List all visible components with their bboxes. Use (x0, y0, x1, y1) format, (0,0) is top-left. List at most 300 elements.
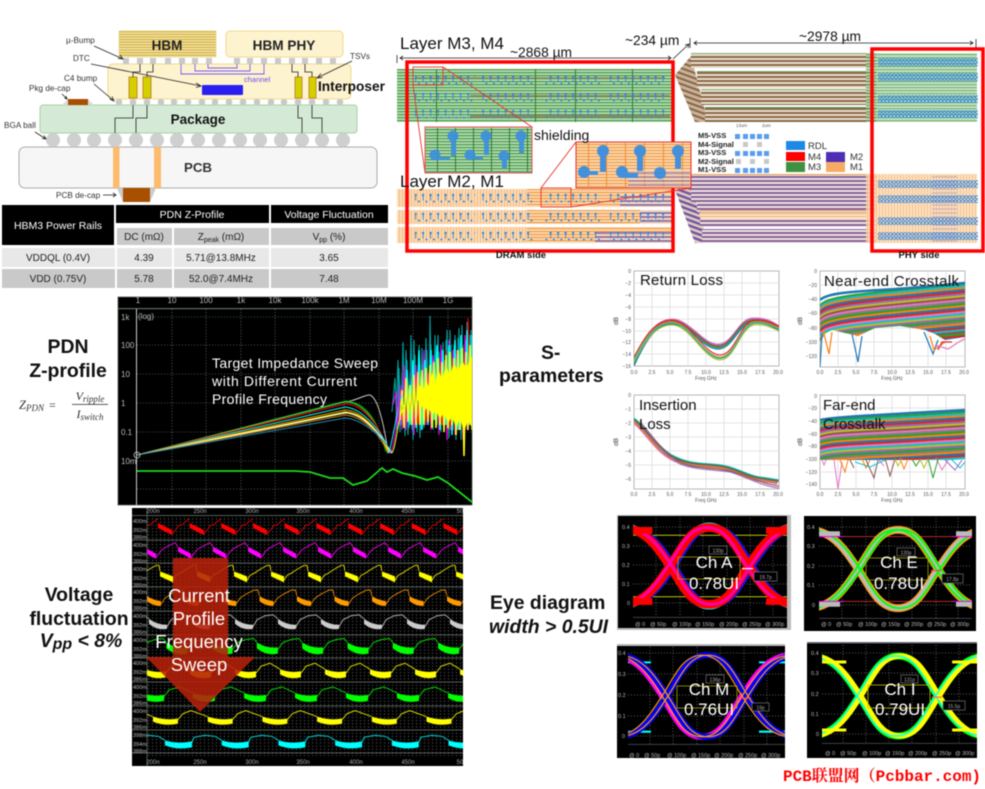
layer stack legend (698, 123, 771, 174)
row VDDQL: 3.65 (319, 253, 339, 264)
axes: −2 (625, 421, 631, 427)
heading: PDN Z-profile: Z-profile (29, 360, 107, 382)
x axis labels: 100k (301, 296, 320, 305)
axis labels: @ 100p (667, 753, 686, 759)
axis labels: @ 50p (836, 622, 852, 628)
channel label: Ch M (689, 680, 729, 699)
HBM PHY die: HBM PHY (253, 38, 315, 53)
DTC (202, 85, 243, 95)
waveforms (147, 516, 463, 753)
chart title (823, 397, 886, 433)
M3 M4 routing middle (691, 53, 876, 122)
voltage axis labels: 386m (133, 725, 147, 731)
axes: Freq GHz (695, 376, 717, 382)
voltage axis labels: 392m (133, 647, 147, 653)
axes: −2 (625, 281, 631, 287)
chart: far-end crosstalk (797, 394, 969, 504)
row VDDQL (2, 248, 388, 267)
axes: −40 (809, 419, 817, 425)
material colour legend: M1 (850, 162, 863, 173)
axis labels: 0.3 (811, 671, 819, 677)
x axis labels: 10k (269, 296, 282, 305)
layer stack legend: 13um (736, 123, 748, 128)
callout labels: Pkg de-cap (29, 84, 71, 93)
chart title: Loss (639, 416, 671, 433)
axis labels: @ 250p (742, 622, 761, 628)
layout panel (397, 29, 983, 261)
axes: dB (797, 317, 804, 325)
table sub-header (117, 228, 388, 245)
M3 M4 PHY side (866, 53, 978, 122)
time axis: 50 (457, 509, 464, 515)
axes: 2.5 (649, 492, 656, 498)
sweep arrow label: Sweep (171, 654, 227, 675)
axes: −4 (625, 293, 631, 299)
axes: −120 (806, 470, 817, 476)
row VDD: VDD (0.75V) (30, 274, 86, 285)
axes: 20.0 (773, 370, 783, 376)
layer stack legend: M5-VSS (698, 131, 726, 140)
axes: −3 (625, 435, 631, 441)
micro bumps (123, 58, 336, 64)
axes: 0.0 (817, 492, 824, 498)
dimension labels: ~2868 µm (510, 45, 572, 60)
channel label (875, 680, 925, 719)
heading: S-parameters: parameters (499, 365, 604, 387)
y axis labels: 1k (121, 313, 130, 322)
table: HBM3 power rails (2, 205, 388, 288)
axis labels (622, 525, 784, 628)
voltage axis labels: 400m (133, 661, 147, 667)
axis labels: @ 0 (635, 622, 645, 628)
channel label: Ch A (696, 553, 733, 572)
axis labels (811, 651, 974, 757)
table sub-header: V (313, 232, 319, 243)
voltage axis labels: 400m (133, 614, 147, 620)
formula: V (76, 389, 83, 403)
callout labels: BGA ball (4, 121, 36, 130)
side captions (496, 250, 940, 261)
axis labels (807, 525, 969, 628)
axis labels: 0.1 (811, 712, 819, 718)
axis labels: 0.4 (811, 651, 819, 657)
x axis labels: 10 (168, 296, 177, 305)
axes: 7.5 (871, 492, 878, 498)
curves (820, 410, 965, 489)
heading: PDN Z-profile (29, 336, 107, 382)
y axis labels: (log) (138, 312, 154, 321)
voltage axis labels: 392m (133, 599, 147, 605)
TSVs (129, 77, 316, 98)
axis labels: 0.4 (622, 525, 630, 531)
axis labels: @ 50p (644, 753, 660, 759)
chart annotation: with Different Current (211, 373, 357, 389)
axes: −120 (806, 354, 817, 360)
marker tags (706, 675, 769, 712)
voltage axis labels: 386m (133, 559, 147, 565)
axes: −12 (623, 340, 631, 346)
sweep arrow label: Profile (173, 608, 225, 629)
eye traces (612, 655, 798, 737)
axes: 12.5 (719, 370, 729, 376)
axes (797, 269, 969, 382)
axes: 20.0 (773, 492, 783, 498)
axes: 15.0 (737, 370, 747, 376)
axis labels: @ 150p (881, 622, 900, 628)
voltage axis labels (133, 519, 147, 755)
voltage axis labels: 392m (133, 718, 147, 724)
axes: −60 (809, 432, 817, 438)
dimension labels: ~2978 µm (799, 29, 861, 44)
sweep arrow label: Frequency (155, 631, 243, 652)
voltage axis labels: 386m (133, 583, 147, 589)
axes: −6 (625, 305, 631, 311)
time axis: 200n (146, 509, 160, 515)
M2 M1 PHY side (866, 174, 978, 243)
frame (617, 644, 785, 758)
axis labels: 0.3 (807, 544, 815, 550)
axes: −100 (806, 340, 817, 346)
axis labels: @ 200p (904, 622, 923, 628)
axes: 7.5 (871, 370, 878, 376)
time axis: 300n (245, 509, 259, 515)
axes: −16 (623, 364, 631, 370)
row VDDQL: VDDQL (0.4V) (26, 253, 90, 264)
eye-width box (868, 685, 930, 708)
axes: Freq GHz (695, 498, 717, 504)
axis labels: @ 0 (821, 622, 831, 628)
layer stack legend: M2-Signal (698, 157, 734, 166)
axes: 5.0 (667, 492, 674, 498)
voltage axis labels: 400m (133, 519, 147, 525)
axis labels: 0.1 (622, 582, 630, 588)
axis labels: 0 (627, 601, 630, 607)
axis labels: 0 (812, 603, 815, 609)
voltage axis labels: 394m (133, 742, 147, 748)
axes: 0 (628, 269, 631, 275)
axis labels: 0.4 (618, 651, 626, 657)
callout arrows (35, 46, 352, 197)
marker tags: 130p (900, 550, 912, 556)
axis labels: 0.2 (811, 692, 819, 698)
table sub-header: peak (204, 237, 220, 244)
interposer: Interposer (318, 79, 386, 94)
time axis (146, 509, 464, 766)
axis labels: @ 150p (885, 751, 904, 757)
y axis labels: 10 (121, 370, 130, 379)
x axis labels: 100 (199, 296, 213, 305)
axes: 0 (814, 394, 817, 400)
axis labels: 0 (816, 732, 819, 738)
voltage axis labels: 400m (133, 638, 147, 644)
channel label: 0.78UI (874, 574, 924, 593)
heading: eye diagram: Eye diagram (490, 592, 605, 614)
dimension labels (510, 29, 861, 60)
axes: 12.5 (719, 492, 729, 498)
axes: −20 (809, 283, 817, 289)
voltage axis labels: 400m (133, 567, 147, 573)
eye traces (806, 530, 985, 608)
axes: 10.0 (701, 492, 711, 498)
axis labels: @ 200p (719, 622, 738, 628)
callout labels: TSVs (350, 52, 370, 61)
voltage axis labels: 386m (133, 630, 147, 636)
formula: switch (80, 412, 104, 422)
layer stack legend: M1-VSS (698, 165, 726, 174)
eye-width box (866, 558, 928, 580)
eye traces (808, 656, 985, 736)
axes: dB (797, 438, 804, 446)
chart title: Crosstalk (823, 416, 886, 433)
PHY side red box (872, 49, 983, 251)
voltage axis labels: 386m (133, 677, 147, 683)
axes: 0 (814, 269, 817, 275)
axis labels: 0.1 (807, 583, 815, 589)
marker tags (709, 546, 777, 581)
chart: return loss (613, 269, 783, 382)
axes: 2.5 (835, 370, 842, 376)
eye-width box (677, 686, 737, 708)
table header: Voltage Fluctuation (284, 209, 374, 221)
heading: Voltage fluctuation (29, 584, 129, 653)
axes (613, 269, 783, 382)
PCB (19, 147, 377, 188)
x axis labels (136, 296, 453, 305)
dimension labels: ~234 µm (625, 33, 679, 48)
formula: = (49, 398, 56, 412)
time axis: 350n (296, 509, 310, 515)
axes: 17.5 (755, 370, 765, 376)
axes: 2.5 (649, 370, 656, 376)
axis labels: 0.3 (618, 672, 626, 678)
heading: Voltage fluctuation: < 8% (72, 630, 122, 652)
axes: dB (613, 438, 620, 446)
voltage axis labels: 400m (133, 709, 147, 715)
frame (617, 515, 791, 630)
chart grid (137, 309, 472, 505)
channel label: 0.79UI (875, 700, 925, 719)
axes: 2.5 (835, 492, 842, 498)
axis labels: 0.3 (622, 544, 630, 550)
axes: −80 (809, 444, 817, 450)
chart: insertion loss (613, 393, 783, 504)
formula: PDN (25, 403, 45, 413)
callout labels: C4 bump (64, 74, 98, 83)
x axis labels: 10M (371, 296, 387, 305)
stack-up diagram (4, 31, 386, 202)
axes: −20 (809, 406, 817, 412)
shielding label: shielding (534, 127, 589, 143)
axes: −4 (625, 449, 631, 455)
x axis labels: 100M (403, 296, 423, 305)
axes: 15.0 (923, 492, 933, 498)
time axis: 200n (146, 760, 160, 766)
sweep arrow label (155, 585, 243, 675)
heading: Voltage fluctuation: fluctuation (29, 608, 129, 630)
curves (632, 418, 779, 488)
callout labels: PCB de-cap (56, 191, 101, 200)
table header: HBM3 Power Rails (14, 220, 102, 232)
package de-cap (62, 99, 94, 105)
axes: −1 (625, 407, 631, 413)
marker tags (901, 675, 965, 710)
axes: −8 (625, 317, 631, 323)
layer stack legend: M3-VSS (698, 148, 726, 157)
side captions: PHY side (898, 250, 940, 261)
axes: 10.0 (887, 370, 897, 376)
channel label (684, 680, 734, 719)
material colour legend: M2 (850, 152, 863, 163)
chart annotation: Target Impedance Sweep (212, 355, 378, 371)
channel label (689, 553, 739, 593)
x axis labels: 1G (443, 296, 453, 305)
HBM die (119, 31, 216, 57)
chart title: Near-end Crosstalk (824, 273, 960, 290)
axis labels: @ 0 (629, 753, 639, 759)
axes: −80 (809, 326, 817, 332)
frame (807, 642, 977, 758)
chart title: Return Loss (640, 272, 723, 289)
axes: −5 (625, 463, 631, 469)
curves (820, 283, 965, 367)
axis labels: @ 300p (761, 753, 780, 759)
voltage axis labels: 392m (133, 552, 147, 558)
voltage axis labels: 388m (133, 749, 147, 755)
formula: ripple (83, 394, 104, 404)
impedance curves (137, 395, 404, 455)
axes: 20.0 (959, 370, 969, 376)
channel routing: channel (244, 75, 271, 84)
eye diagram: Ch E (804, 516, 985, 631)
axis labels: @ 100p (858, 622, 877, 628)
axes: 0.0 (631, 492, 638, 498)
axis labels: 0.2 (807, 564, 815, 570)
axes: −60 (809, 311, 817, 317)
table sub-header: pp (319, 237, 327, 244)
HBM PHY die (226, 31, 343, 57)
axes: 15.0 (923, 370, 933, 376)
marker tags (897, 548, 963, 583)
axes: dB (613, 317, 620, 325)
material colour legend (786, 141, 863, 173)
axis labels: 0 (622, 734, 625, 740)
voltage axis labels: 392m (133, 623, 147, 629)
axes (797, 394, 969, 504)
sweep arrow (146, 558, 255, 712)
row VDD: 52.0@7.4MHz (189, 274, 253, 285)
DC resistance curve (137, 468, 472, 502)
heading: Voltage fluctuation: Voltage (45, 584, 114, 606)
side captions: DRAM side (496, 250, 546, 261)
time axis: 250n (193, 760, 207, 766)
axis labels: @ 50p (650, 622, 666, 628)
eye traces (632, 522, 788, 610)
chart title (639, 397, 697, 433)
axes: −140 (806, 482, 817, 488)
table header (2, 205, 388, 245)
axis labels (618, 651, 780, 759)
axis labels: @ 250p (927, 622, 946, 628)
channel label (874, 553, 924, 593)
heading: S-parameters (499, 342, 604, 387)
axes: 10.0 (887, 492, 897, 498)
voltage axis labels: 400m (133, 685, 147, 691)
eye diagram: Ch M (612, 644, 798, 759)
time axis: 350n (296, 760, 310, 766)
PCB: PCB (184, 160, 212, 175)
axes: 5.0 (853, 492, 860, 498)
axes: 0.0 (817, 370, 824, 376)
axes: −6 (625, 477, 631, 483)
M2 M1 routing middle (691, 174, 876, 243)
layer headings: Layer M2, M1 (400, 172, 504, 191)
time axis: 400n (349, 760, 363, 766)
HBM die: HBM (152, 38, 182, 53)
sweep arrow label: Current (168, 585, 230, 606)
axis labels: @ 150p (695, 622, 714, 628)
chart title: Insertion (639, 397, 697, 414)
time axis: 300n (245, 760, 259, 766)
axes: −14 (623, 352, 631, 358)
chart frame (118, 297, 472, 505)
heading: eye diagram (489, 592, 609, 638)
axis labels: @ 250p (932, 751, 951, 757)
axes: Freq GHz (881, 498, 903, 504)
table header: PDN Z-Profile (160, 209, 225, 221)
C4 bumps (116, 99, 343, 105)
time axis: 50 (457, 760, 464, 766)
row VDD: 5.78 (134, 274, 154, 285)
chart annotation: Profile Frequency (212, 391, 327, 407)
time axis: 250n (193, 509, 207, 515)
callout labels (4, 36, 370, 200)
chart title: Far-end (823, 397, 876, 414)
axis labels: 0.2 (622, 563, 630, 569)
time axis: 450n (401, 760, 415, 766)
axis labels: @ 100p (862, 751, 881, 757)
voltage axis labels: 398m (133, 733, 147, 739)
y axis labels (121, 312, 154, 466)
voltage axis labels: 392m (133, 694, 147, 700)
marker tags: 130p (712, 548, 724, 554)
axes: 7.5 (685, 492, 692, 498)
axes: 12.5 (905, 492, 915, 498)
noise spikes (392, 316, 472, 456)
callout labels: µ-Bump (66, 36, 95, 45)
axes: 10.0 (701, 370, 711, 376)
table sub-header: (mΩ) (219, 232, 244, 243)
DRAM side red box (407, 62, 673, 251)
marker tags: 136p (709, 678, 721, 684)
y axis labels: 10m (121, 457, 137, 466)
axis labels: @ 100p (672, 622, 691, 628)
axis labels: @ 300p (955, 751, 974, 757)
heading: PDN Z-profile: PDN (48, 336, 88, 358)
M2 M1 routing left (397, 189, 673, 243)
channel label: 0.78UI (689, 574, 739, 593)
eye-width box (678, 557, 740, 579)
axes: 15.0 (737, 492, 747, 498)
axes: 17.5 (755, 492, 765, 498)
curves (634, 318, 779, 366)
layer stack legend: M4-Signal (698, 140, 734, 149)
voltage axis labels: 386m (133, 606, 147, 612)
channel routing (181, 64, 271, 84)
heading: Voltage fluctuation: V (40, 630, 53, 652)
x axis labels: 1M (338, 296, 350, 305)
y axis labels: 1 (121, 399, 126, 408)
inset: M2 M1 (576, 142, 691, 188)
